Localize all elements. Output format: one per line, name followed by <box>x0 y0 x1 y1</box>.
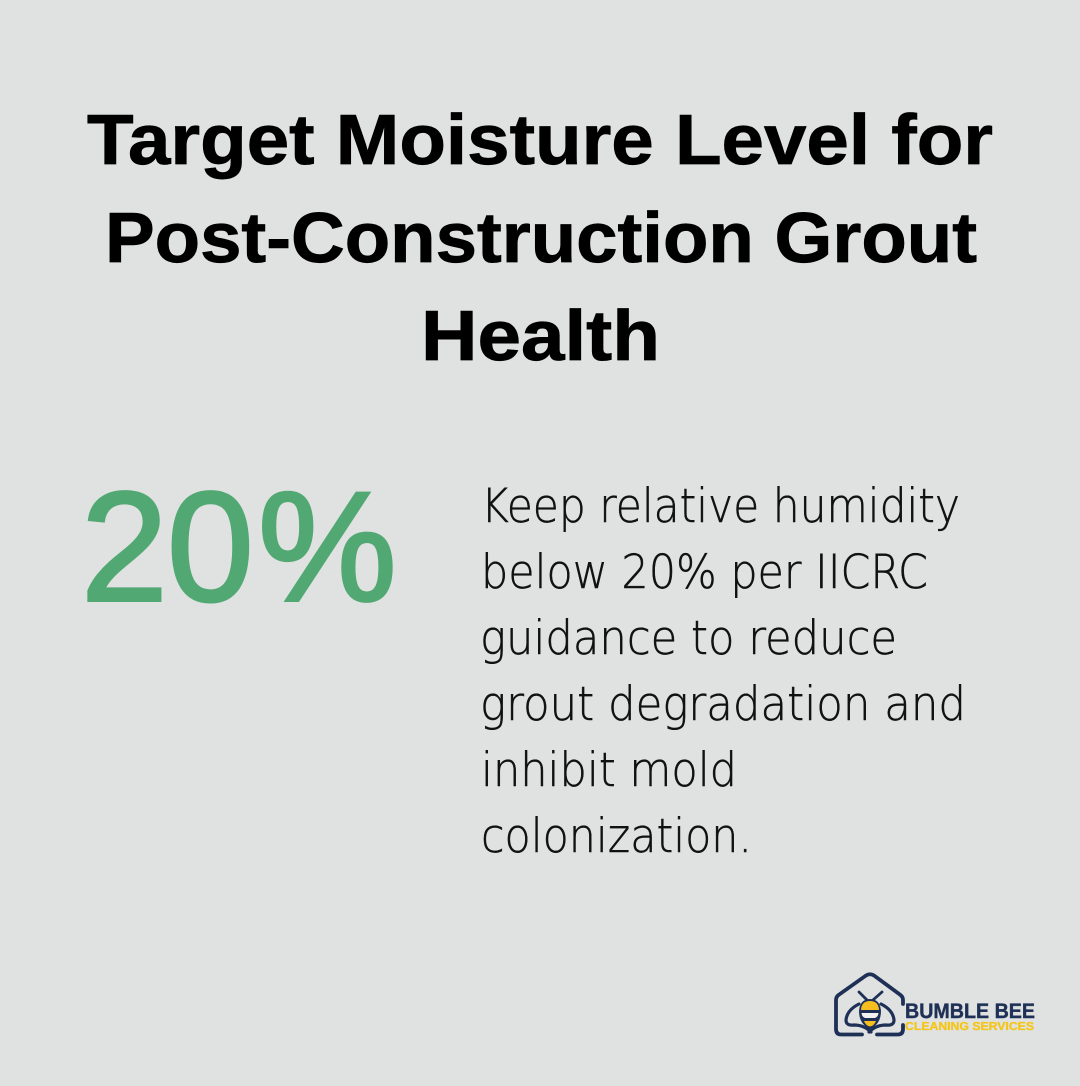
title <box>87 101 993 376</box>
icon: house outline <box>836 974 903 1034</box>
logo name: BUMBLE BEE <box>905 1000 1035 1023</box>
description text: inhibit mold <box>481 743 737 798</box>
description text: grout degradation and <box>480 677 966 732</box>
logo tagline: CLEANING SERVICES <box>905 1021 1034 1033</box>
title: Health <box>421 297 660 376</box>
description text: guidance to reduce <box>480 611 897 666</box>
big statistic: 20%: 20% <box>81 460 397 634</box>
description text: below 20% per IICRC <box>481 545 928 600</box>
title: Post-Construction Grout <box>105 199 977 278</box>
logo: Bumble Bee Cleaning Services <box>836 974 1035 1034</box>
description text: Keep relative humidity <box>481 479 960 534</box>
icon: bee <box>846 992 894 1032</box>
description text: colonization. <box>481 809 752 864</box>
description text <box>480 479 966 864</box>
title: Target Moisture Level for <box>87 101 993 180</box>
